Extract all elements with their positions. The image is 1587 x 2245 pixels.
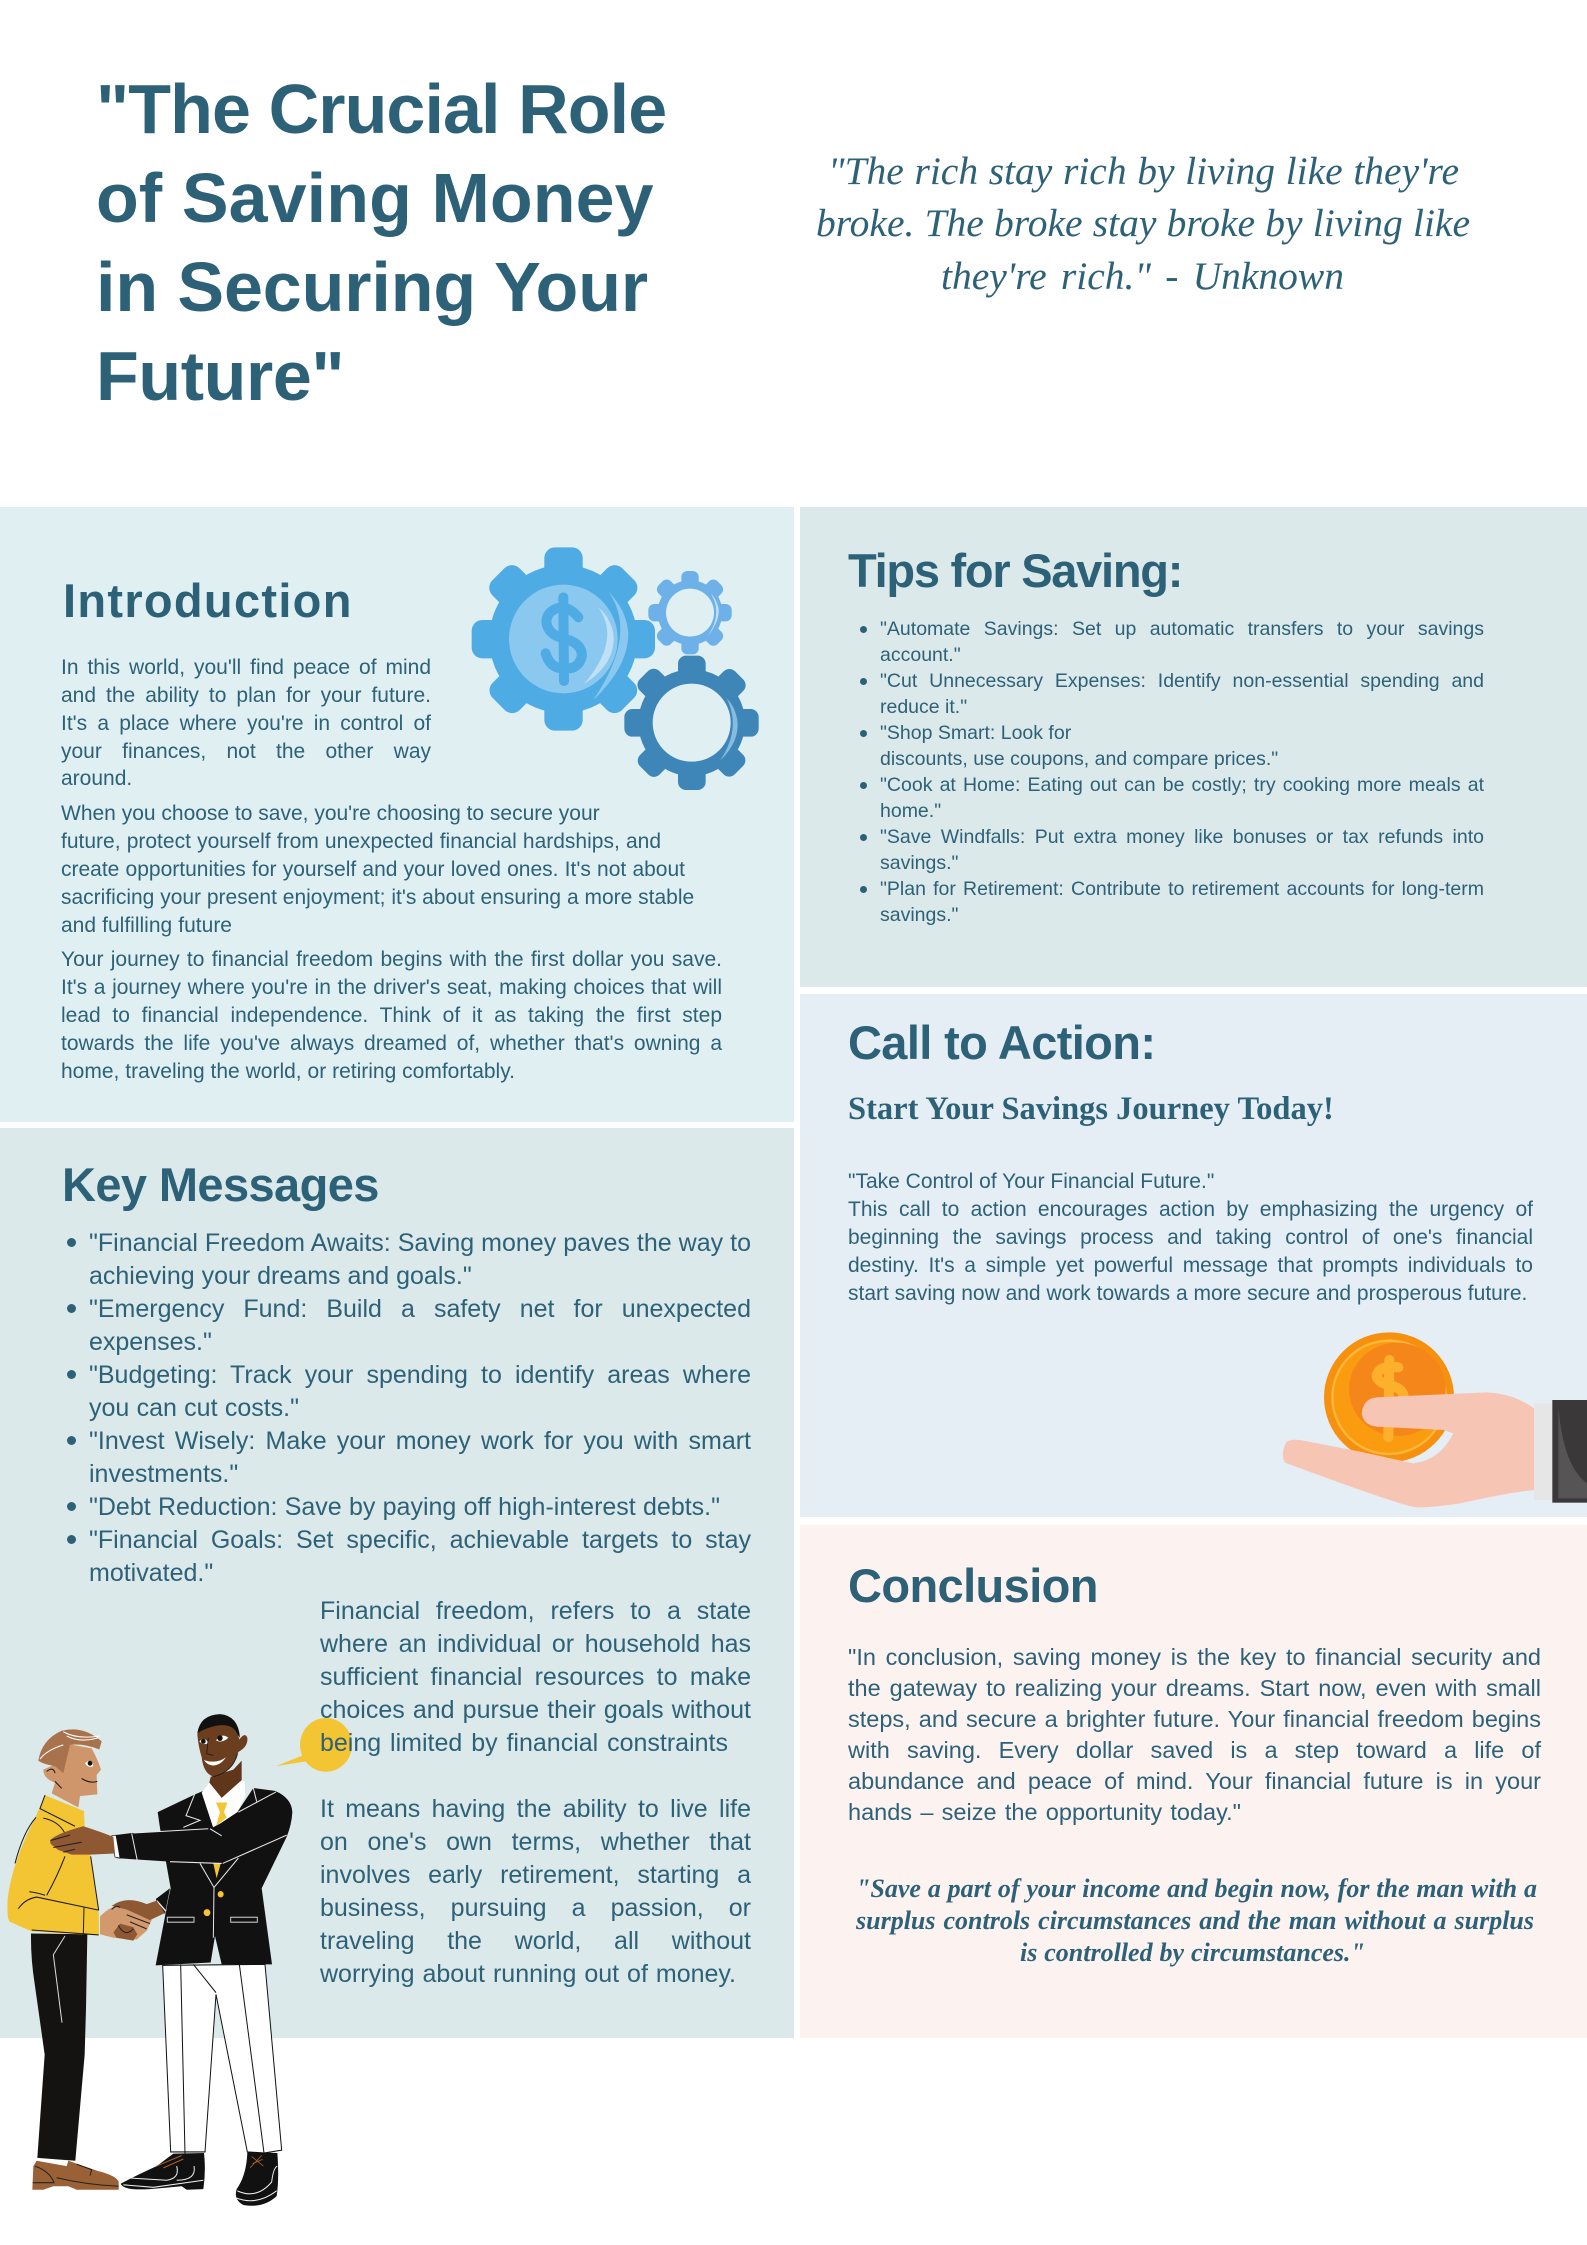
text: living on your own terms: business, pursuing a passion, or [320, 1894, 751, 1922]
text: introduction paragraph 1: In this world, you'll find peace of mind [61, 656, 431, 679]
text: introduction paragraph 3 [61, 948, 722, 1083]
list: key messages: investments." [89, 1460, 238, 1488]
text: call to action body [848, 1170, 1533, 1305]
title: Future" [96, 337, 344, 415]
list: key messages: expenses." [89, 1328, 212, 1356]
heading: tips for saving: Tips for Saving: [848, 544, 1182, 596]
illustration: hand holding a coin [1282, 1332, 1587, 1508]
text: conclusion body: steps, and secure a brighter future. Your financial freedom begins [848, 1706, 1541, 1732]
title: "The Crucial Role [96, 70, 666, 148]
text: introduction paragraph 3: Your journey to financial freedom begins with the first dollar you save. [61, 948, 722, 971]
header quote: "The rich stay rich by living like they're [828, 149, 1459, 193]
text: living on your own terms [320, 1795, 752, 1988]
list: key messages: "Financial Freedom Awaits: Saving money paves the way to [89, 1229, 751, 1257]
text: introduction paragraph 2: When you choose to save, you're choosing to secure your [61, 802, 600, 825]
text: conclusion body [848, 1644, 1542, 1825]
list: key messages: you can cut costs." [89, 1394, 299, 1422]
list: key messages [67, 1229, 751, 1587]
speech bubble [276, 1718, 352, 1772]
man in black suit [50, 1714, 292, 2206]
text: call to action body: "Take Control of Your Financial Future." [848, 1170, 1214, 1193]
list: saving tips: "Cut Unnecessary Expenses: Identify non-essential spending and [880, 670, 1484, 692]
sleeve [1534, 1400, 1587, 1503]
text: introduction paragraph 1: around. [61, 767, 132, 790]
closing quote: is controlled by circumstances." [1020, 1938, 1365, 1967]
list: key messages: "Budgeting: Track your spending to identify areas where [89, 1361, 751, 1389]
closing quote [856, 1874, 1537, 1967]
text: call to action body: beginning the savings process and taking control of one's financial [848, 1226, 1533, 1249]
list: saving tips: reduce it." [880, 696, 967, 718]
illustration: two men shaking hands with speech bubble [7, 1714, 352, 2206]
text: introduction paragraph 1: It's a place where you're in control of [61, 712, 431, 735]
text: call to action body: destiny. It's a simple yet powerful message that prompts individuals to [848, 1254, 1533, 1277]
text: financial freedom definition [320, 1597, 751, 1757]
heading: call to action: Call to Action: [848, 1016, 1155, 1068]
text: introduction paragraph 1: and the ability to plan for your future. [61, 684, 431, 707]
text: living on your own terms: It means having the ability to live life [320, 1795, 751, 1823]
text: conclusion body: abundance and peace of mind. Your financial future is in your [848, 1768, 1541, 1794]
panel: conclusion [800, 1525, 1587, 2038]
text: call to action body: This call to action encourages action by emphasizing the urgency of [848, 1198, 1533, 1221]
list: key messages: "Debt Reduction: Save by paying off high-interest debts." [89, 1493, 720, 1521]
list: key messages: "Invest Wisely: Make your money work for you with smart [89, 1427, 751, 1455]
panel: introduction [0, 507, 794, 1122]
hand [1283, 1392, 1534, 1507]
header quote: broke. The broke stay broke by living like [816, 201, 1470, 245]
panel: call to action [800, 994, 1587, 1517]
text: financial freedom definition: Financial freedom, refers to a state [320, 1597, 751, 1625]
list: saving tips: "Cook at Home: Eating out can be costly; try cooking more meals at [880, 774, 1484, 796]
title: of Saving Money [96, 159, 654, 237]
list: saving tips: "Save Windfalls: Put extra money like bonuses or tax refunds into [880, 826, 1484, 848]
list: saving tips: account." [880, 644, 961, 666]
text: financial freedom definition: sufficient financial resources to make [320, 1663, 751, 1691]
subheading: start your savings journey: Start Your Savings Journey Today! [848, 1091, 1334, 1127]
title [96, 70, 666, 415]
text: introduction paragraph 3: towards the life you've always dreamed of, whether that's owning a [61, 1032, 722, 1055]
list: saving tips: "Plan for Retirement: Contribute to retirement accounts for long-term [880, 878, 1484, 900]
text: introduction paragraph 1 [61, 656, 431, 790]
text: conclusion body: with saving. Every dollar saved is a step toward a life of [848, 1737, 1541, 1763]
icon: gears with dollar sign [472, 547, 759, 790]
heading: conclusion: Conclusion [848, 1558, 1098, 1612]
list: key messages: achieving your dreams and goals." [89, 1262, 472, 1290]
list: saving tips: home." [880, 800, 941, 822]
text: financial freedom definition: choices and pursue their goals without [320, 1696, 751, 1724]
text: financial freedom definition: where an individual or household has [320, 1630, 751, 1658]
text: conclusion body: the gateway to realizing your dreams. Start now, even with small [848, 1675, 1541, 1701]
text: introduction paragraph 1: your finances, not the other way [61, 740, 431, 763]
list: key messages: "Emergency Fund: Build a safety net for unexpected [89, 1295, 751, 1323]
list: key messages: motivated." [89, 1559, 213, 1587]
text: introduction paragraph 2: sacrificing your present enjoyment; it's about ensuring a more stable [61, 886, 694, 909]
heading: introduction: Introduction [63, 574, 353, 626]
man in yellow shirt [7, 1729, 119, 2190]
handshake [100, 1888, 170, 1941]
list: saving tips: "Automate Savings: Set up automatic transfers to your savings [880, 618, 1484, 640]
header quote: they're rich." - Unknown [941, 254, 1344, 298]
coin [1324, 1332, 1454, 1462]
list: saving tips: discounts, use coupons, and compare prices." [880, 748, 1278, 770]
text: living on your own terms: involves early retirement, starting a [320, 1861, 751, 1889]
list: key messages: "Financial Goals: Set specific, achievable targets to stay [89, 1526, 751, 1554]
closing quote: surplus controls circumstances and the man without a surplus [856, 1906, 1534, 1935]
text: conclusion body: "In conclusion, saving money is the key to financial security and [848, 1644, 1541, 1670]
header quote [816, 149, 1470, 298]
text: call to action body: start saving now and work towards a more secure and prosperous future. [848, 1282, 1527, 1305]
text: conclusion body: hands – seize the opportunity today." [848, 1799, 1241, 1825]
text: introduction paragraph 3: lead to financial independence. Think of it as taking the first step [61, 1004, 722, 1027]
text: living on your own terms: worrying about running out of money. [320, 1960, 736, 1988]
closing quote: "Save a part of your income and begin now, for the man with a [856, 1874, 1537, 1903]
text: introduction paragraph 2: future, protect yourself from unexpected financial hardships, and [61, 830, 661, 853]
panel: key messages [0, 1128, 794, 2038]
title: in Securing Your [96, 248, 648, 326]
text: living on your own terms: on one's own terms, whether that [320, 1828, 751, 1856]
text: introduction paragraph 2: and fulfilling future [61, 914, 232, 937]
text: financial freedom definition: being limited by financial constraints [320, 1729, 728, 1757]
panel: tips for saving [800, 507, 1587, 987]
text: introduction paragraph 3: It's a journey where you're in the driver's seat, making choices that will [61, 976, 722, 999]
list: saving tips [860, 618, 1484, 926]
heading: key messages: Key Messages [62, 1158, 379, 1210]
list: saving tips: savings." [880, 852, 958, 874]
list: saving tips: savings." [880, 904, 958, 926]
text: introduction paragraph 2 [61, 802, 694, 937]
text: introduction paragraph 3: home, traveling the world, or retiring comfortably. [61, 1060, 515, 1083]
text: living on your own terms: traveling the world, all without [320, 1927, 751, 1955]
text: introduction paragraph 2: create opportunities for yourself and your loved ones. It's not about [61, 858, 685, 881]
list: saving tips: "Shop Smart: Look for [880, 722, 1071, 744]
